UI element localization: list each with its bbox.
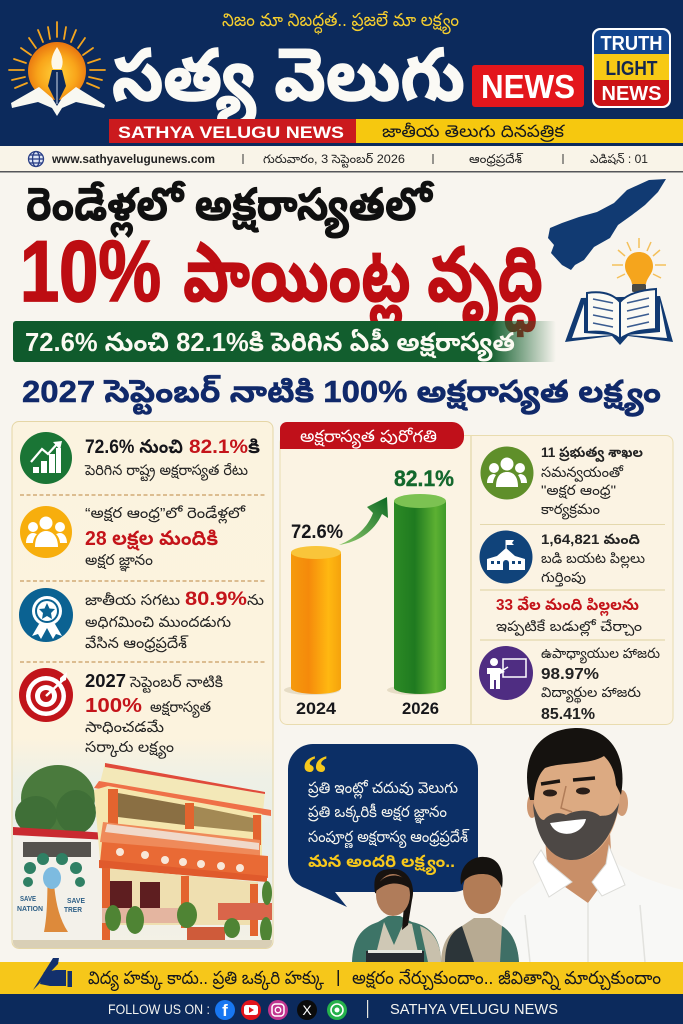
stat: government departments: "అక్షర ఆంధ్ర" — [541, 482, 616, 499]
stat: attendance: ఉపాధ్యాయుల హాజరు — [541, 645, 660, 664]
info bar: ఎడిషన్ : 01 — [590, 152, 648, 166]
fact: national average — [19, 588, 264, 653]
students illustration — [352, 857, 519, 962]
school building photo — [13, 763, 272, 948]
fact: literacy rate — [20, 432, 260, 484]
quote speech bubble: ప్రతి ఒక్కరికీ అక్షర జ్ఞానం — [308, 803, 447, 824]
stat: out of school children: గుర్తింపు — [541, 569, 586, 587]
school building photo: NATION — [17, 904, 43, 913]
fact: 2027 target: 2027 — [85, 671, 126, 691]
fact: national average: ను — [247, 592, 264, 609]
school building photo: SAVE — [20, 894, 36, 903]
stat: children enrolled: ఇప్పటికే బడుల్లో చేర్చాం — [496, 618, 642, 637]
footer: FOLLOW US ON : — [108, 1002, 210, 1017]
headline line 2: పాయింట్ల వృద్ధి — [183, 233, 543, 337]
stat: attendance: విద్యార్థుల హాజరు — [541, 684, 641, 704]
fact: literacy rate: పెరిగిన రాష్ట్ర అక్షరాస్యత రేటు — [84, 462, 248, 482]
info bar: ఆంధ్రప్రదేశ్ — [469, 152, 524, 167]
chart heading: అక్షరాస్యత పురోగతి — [300, 427, 437, 449]
boy student — [441, 857, 519, 962]
icon: hand writing with pen — [33, 958, 72, 990]
red name strip: SATHYA VELUGU NEWS — [118, 123, 344, 142]
fact: 2027 target: సాధించడమే — [85, 719, 164, 736]
panel: progress chart and stats — [280, 422, 673, 724]
headline line 1: రెండేళ్లలో అక్షరాస్యతలో — [26, 179, 434, 239]
school building photo: TRER — [64, 905, 83, 914]
fact: national average: అధిగమించి ముందడుగు — [85, 614, 231, 631]
bar chart: literacy 2024 vs 2026: 72.6% — [291, 522, 343, 543]
info bar: గురువారం, 3 సెప్టెంబర్ 2026 — [263, 152, 405, 168]
stat: children enrolled — [496, 596, 642, 637]
bar chart: literacy 2024 vs 2026 — [284, 466, 454, 718]
fact: literacy rate: 82.1% — [189, 437, 248, 458]
panel: key facts — [12, 422, 273, 948]
stat: government departments: సమన్వయంతో — [541, 464, 624, 482]
stat: out of school children: 1,64,821 మంది — [541, 531, 640, 547]
fact: national average: జాతీయ సగటు — [85, 592, 180, 609]
footer: SATHYA VELUGU NEWS — [390, 1002, 558, 1018]
red name strip — [109, 119, 356, 143]
stat: government departments — [480, 444, 643, 520]
Truth Light News badge: TRUTH — [600, 33, 662, 55]
logo: sun, pen nib and open book — [9, 22, 105, 116]
icon: quotation mark: “ — [302, 746, 328, 803]
fact: 2027 target: సెప్టెంబర్ నాటికి — [129, 674, 223, 693]
headline line 2: 10% — [20, 224, 161, 320]
yellow slogan banner: విద్య హక్కు కాదు.. ప్రతి ఒక్కరి హక్కు — [88, 968, 324, 991]
icon: open book — [565, 289, 673, 345]
fact: 28 lakh people: అక్షర జ్ఞానం — [85, 552, 153, 572]
fact: 2027 target: 100% — [85, 695, 142, 717]
headline line 2 — [20, 224, 543, 337]
stat: government departments: కార్యక్రమం — [541, 501, 600, 520]
info bar: www.sathyavelugunews.com — [51, 154, 215, 166]
bar chart: literacy 2024 vs 2026: 82.1% — [394, 466, 454, 491]
stat: out of school children — [480, 530, 645, 587]
chart heading — [280, 422, 464, 449]
green sub-headline banner — [13, 321, 556, 362]
icon: X: X — [302, 1002, 312, 1018]
fact: national average: 80.9% — [185, 589, 247, 610]
fact: 2027 target — [19, 668, 223, 759]
girl student — [352, 869, 441, 962]
info bar — [0, 146, 683, 172]
stat: children enrolled: 33 వేల మంది పిల్లలను — [496, 596, 639, 617]
fact: national average: వేసిన ఆంధ్రప్రదేశ్ — [85, 635, 189, 653]
quote speech bubble — [288, 744, 478, 907]
fact: 2027 target: అక్షరాస్యత — [150, 699, 211, 718]
green sub-headline banner: 72.6% నుంచి 82.1%కి పెరిగిన ఏపీ అక్షరాస్యత — [25, 327, 515, 362]
Truth Light News badge: NEWS — [602, 83, 662, 105]
fact: literacy rate: కి — [248, 437, 260, 458]
fact: literacy rate: 72.6% నుంచి — [85, 437, 183, 458]
yellow subtitle strip: జాతీయ తెలుగు దినపత్రిక — [382, 122, 565, 142]
fact: 28 lakh people: 28 లక్షల మందికి — [85, 528, 218, 551]
tagline: నిజం మా నిబద్ధత.. ప్రజలే మా లక్ష్యం — [222, 10, 459, 35]
NEWS box: NEWS — [481, 68, 575, 105]
fact: 28 lakh people: “అక్షర ఆంధ్ర”లో రెండేళ్లలో — [85, 505, 247, 524]
man portrait — [497, 728, 683, 962]
stat: attendance — [479, 645, 660, 723]
masthead title: సత్య వెలుగు — [112, 36, 465, 130]
footer — [0, 994, 683, 1024]
icon: X — [297, 1000, 317, 1020]
map of Andhra Pradesh — [548, 179, 666, 270]
stat: attendance: 98.97% — [541, 666, 599, 683]
quote speech bubble: సంపూర్ణ అక్షరాస్య ఆంధ్రప్రదేశ్ — [308, 829, 469, 848]
navy target headline: 2027 సెప్టెంబర్ నాటికి 100% అక్షరాస్యత లక్ష్యం — [22, 374, 661, 417]
icon: globe — [28, 152, 44, 166]
stat: government departments: 11 ప్రభుత్వ శాఖల — [541, 444, 643, 462]
stat: attendance: 85.41% — [541, 706, 595, 723]
school building photo: SAVE — [67, 896, 85, 905]
quote speech bubble: మన అందరి లక్ష్యం.. — [308, 852, 455, 875]
arrow: growth — [339, 497, 388, 545]
icon: facebook — [215, 1000, 235, 1020]
icon: instagram — [268, 1000, 288, 1020]
icon: light bulb — [612, 238, 666, 292]
Truth Light News badge — [592, 28, 671, 108]
icon: facebook: f — [222, 1001, 228, 1020]
bar chart: literacy 2024 vs 2026: 2024 — [296, 700, 337, 718]
yellow slogan banner: అక్షరం నేర్చుకుందాం.. జీవితాన్ని మార్చుకుందాం — [352, 968, 661, 991]
yellow subtitle strip — [356, 119, 683, 143]
Truth Light News badge: LIGHT — [606, 58, 658, 80]
fact: 2027 target: సర్కారు లక్ష్యం — [85, 739, 174, 759]
stat: out of school children: బడి బయట పిల్లలు — [541, 550, 645, 569]
masthead — [0, 0, 683, 146]
bar chart: literacy 2024 vs 2026: 2026 — [402, 700, 439, 718]
fact: 28 lakh people — [20, 505, 247, 572]
yellow slogan banner — [0, 958, 683, 994]
icon: youtube — [241, 1000, 261, 1020]
quote speech bubble: ప్రతి ఇంట్లో చదువు వెలుగు — [308, 779, 458, 799]
icon: whatsapp — [327, 1000, 347, 1020]
